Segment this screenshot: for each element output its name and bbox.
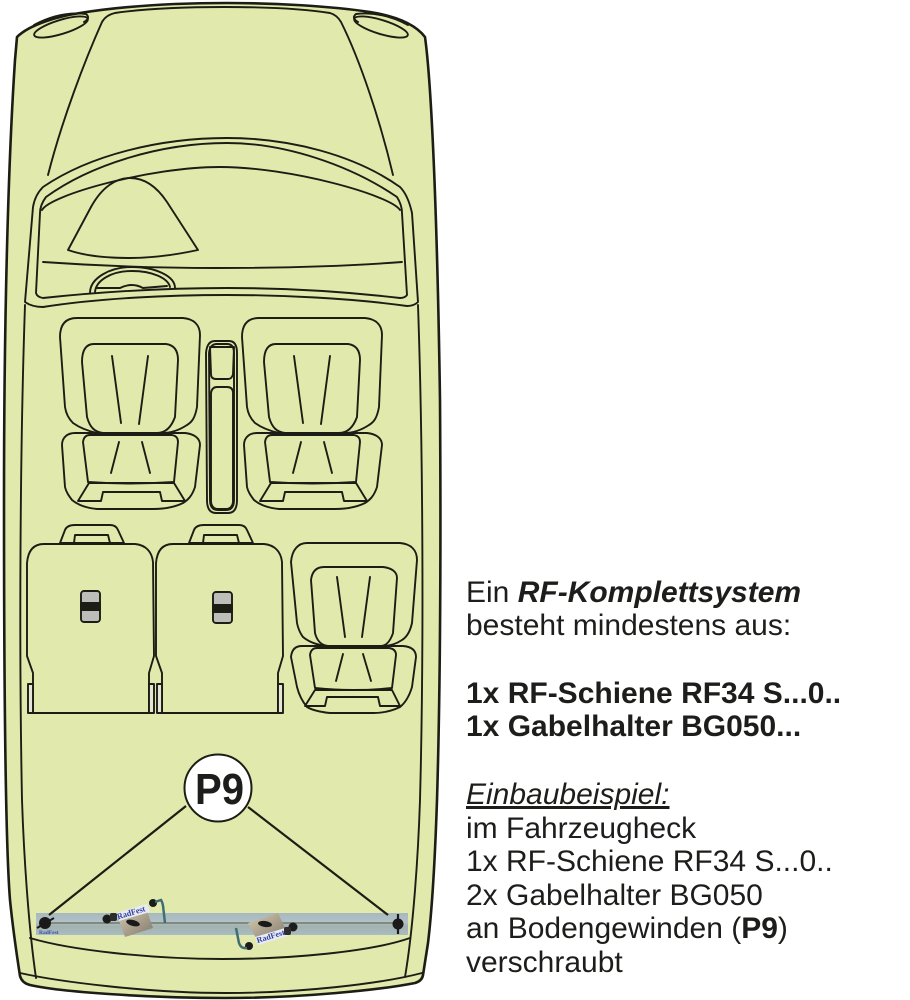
front right seat: [242, 318, 382, 509]
vehicle body outline: [4, 3, 440, 998]
rear middle seat with child seat mount: [156, 525, 283, 713]
installation line 5: verschraubt: [466, 946, 623, 979]
intro text line 2: besteht mindestens aus:: [466, 609, 791, 642]
installation line 1: im Fahrzeugheck: [466, 812, 697, 845]
front left seat: [60, 318, 200, 509]
steering wheel: [90, 267, 175, 293]
installation line 3: 2x Gabelhalter BG050: [466, 879, 763, 912]
right floor bolt: [392, 914, 404, 934]
installation example heading: Einbaubeispiel:: [466, 778, 669, 811]
intro text: Ein RF-Komplettsystem: [466, 576, 801, 609]
fork bracket right: RadFest: [255, 928, 286, 945]
rear right seat: [291, 543, 417, 713]
system description text: [466, 576, 841, 979]
inner side lines and rear edge: [20, 305, 422, 993]
leader lines from P9 badge to floor threads: [49, 806, 388, 915]
fork bracket right: [236, 913, 298, 950]
vehicle top view illustration: [4, 3, 440, 998]
centre console: [206, 341, 237, 513]
bonnet and headlights: [32, 7, 410, 175]
mounting rail assembly: [36, 899, 408, 950]
installation line 2: 1x RF-Schiene RF34 S...0..: [466, 845, 833, 878]
part list line 1: 1x RF-Schiene RF34 S...0..: [466, 677, 841, 710]
P9 badge: [184, 754, 252, 822]
windscreen and dashboard: [25, 138, 418, 307]
left floor bolt: RadFest: [39, 930, 59, 936]
part list line 2: 1x Gabelhalter BG050...: [466, 710, 801, 743]
left floor bolt: [37, 917, 59, 936]
P9 badge: P9: [195, 765, 244, 814]
fork bracket left: RadFest: [116, 903, 146, 921]
RF rail: [36, 913, 408, 935]
installation line 4: an Bodengewinden (P9): [466, 912, 788, 945]
rear left seat with child seat mount: [27, 525, 154, 713]
fork bracket left: [102, 899, 165, 937]
